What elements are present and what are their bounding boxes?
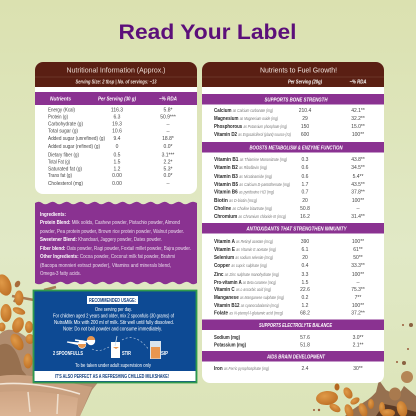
nutrition rows: --	[166, 181, 170, 187]
panel: ingredients: Other Ingredients: Cocoa powder, Coconut milk fat powder, Brahmi	[40, 254, 175, 260]
section: metabolism: BOOSTS METABOLISM & ENZYME FUNCTION	[250, 146, 343, 152]
column headings	[35, 92, 197, 105]
nutrition rows: Added sugar (unrefined) (g)	[48, 136, 105, 142]
table header: Nutritional Information (Approx.)	[66, 66, 166, 74]
section: immunity: 390	[301, 239, 309, 245]
section: immunity: 37.2**	[351, 310, 365, 316]
nutrition rows: 0.0*	[164, 173, 172, 179]
illustration: milkshake glass with almonds	[0, 272, 100, 416]
nutrition rows: Total Fat (g)	[48, 160, 70, 166]
illustration: almonds and walnuts bottom right	[313, 323, 416, 416]
section: brain development: 30**	[353, 366, 363, 372]
section: metabolism: 43.5**	[351, 182, 365, 188]
section: bone strength: Magnesium as Magnesium oxide (mg)	[214, 116, 278, 122]
section: bone strength: 15.0**	[351, 124, 365, 130]
icon: stir glass: STIR	[122, 351, 131, 357]
icon: sip glass: SIP	[161, 351, 168, 357]
nutrition rows: Protein (g)	[48, 114, 68, 120]
milkshake strip	[34, 371, 196, 381]
section: electrolyte balance: SUPPORTS ELECTROLYTE BALANCE	[259, 323, 332, 329]
section: brain development: 2.4	[302, 366, 309, 372]
section: immunity: 22.6	[300, 287, 310, 293]
section: brain development: Iron as Ferric pyrophosphate (mg)	[214, 366, 269, 372]
section: metabolism: Vitamin B5 as Calcium D-pantothenate (mg)	[214, 182, 291, 188]
panel: ingredients: Omega-3 fatty acids.	[40, 271, 81, 277]
section: metabolism: 16.2	[300, 214, 310, 220]
section: metabolism: 31.4**	[351, 214, 365, 220]
section: electrolyte balance: Sodium (mg)	[214, 335, 240, 341]
panel: nutritional information	[35, 62, 197, 194]
nutrition rows: 0.00	[112, 173, 122, 179]
panel: ingredients: Protein Blend: Milk solids, Cashew powder, Pistachio powder, Almond	[40, 220, 180, 226]
nutrition rows: Added sugar (refined) (g)	[48, 144, 100, 150]
nutrition rows: 0	[116, 144, 119, 150]
panel: nutrients to fuel growth	[202, 62, 384, 383]
nutrition rows: 0.0*	[164, 144, 172, 150]
nutrition rows: Saturated fat (g)	[48, 166, 82, 172]
section: immunity: 7**	[355, 295, 361, 301]
section: immunity: 50**	[353, 255, 363, 261]
section: metabolism: Choline as Choline bitartrate (mg)	[214, 206, 273, 212]
icon: two spoonfuls	[53, 336, 95, 357]
section: bone strength: 150	[301, 124, 309, 130]
nutrition rows: 10.6	[112, 128, 122, 134]
section: immunity: ANTIOXIDANTS THAT STRENGTHEN IMMUNITY	[246, 226, 347, 232]
section: immunity: 33.3**	[351, 263, 365, 269]
section: metabolism: Vitamin B6 as pyridoxine HCl (mg)	[214, 190, 274, 196]
arrows between steps	[92, 338, 149, 350]
nutrition rows: --	[166, 128, 170, 134]
section: bone strength: SUPPORTS BONE STRENGTH	[264, 98, 328, 104]
section: bone strength: 210.4	[299, 108, 311, 114]
icon: two spoonfuls: 2 SPOONFULLS	[53, 351, 83, 357]
usage instructions: Note: Do not boil powder and consume immediately.	[63, 326, 162, 332]
column headings: ~% RDA	[159, 96, 177, 102]
section: immunity: Vitamin B12 as cyanocobalamin (mcg)	[214, 303, 279, 309]
section: bone strength: Calcium as Calcium carbonate (mg)	[214, 108, 273, 114]
nutrition rows: 0.00	[112, 181, 122, 187]
section: electrolyte balance: 3.0**	[353, 335, 363, 341]
section: metabolism: Vitamin B1 as Thiamine Mononitrate (mg)	[214, 157, 288, 163]
column headings: Nutrients	[50, 96, 71, 102]
section: metabolism: 100**	[352, 198, 364, 204]
usage instructions	[53, 307, 174, 332]
section: electrolyte balance: Potassium (mg)	[214, 342, 246, 348]
section: immunity: Vitamin E as Vitamin E acetate (mg)	[214, 247, 276, 253]
nutrition rows: Trans fat (g)	[48, 173, 72, 179]
panel: ingredients: Fiber blend: Oats powder, Ragi powder, Foxtail millet powder, Bajra powder.	[40, 246, 191, 252]
section: metabolism: 5.4**	[353, 174, 363, 180]
section: immunity: 100**	[352, 303, 364, 309]
icon: sip glass	[150, 341, 168, 359]
section: metabolism: --	[356, 206, 360, 212]
section: immunity: Zinc as Zinc sulphate monohydrate (mg)	[214, 272, 279, 278]
section: electrolyte balance	[202, 320, 384, 348]
nutrition rows: 3.1***	[162, 152, 174, 158]
section: bone strength: Phosphorous as Potassium phosphate (mg)	[214, 124, 287, 130]
section: immunity: 68.2	[300, 310, 310, 316]
panel: ingredients: (Bacopa monnieri extract powder), Vitamins and minerals blend,	[40, 263, 171, 269]
panel: ingredients: Sweetener Blend: Khandsari, Jaggery powder, Dates powder.	[40, 237, 162, 243]
section: immunity: 1.5	[302, 280, 309, 286]
section: immunity: Folate as N-pteroyl-l-glutamic acid (mcg)	[214, 310, 284, 316]
section: bone strength: 42.1**	[351, 108, 365, 114]
section: metabolism: 37.8**	[351, 190, 365, 196]
section: immunity: 61**	[353, 247, 363, 253]
milkshake strip: IT'S ALSO PERFECT AS A REFRESHING CHILLED MILKSHAKE!	[55, 374, 169, 380]
icon: stir glass	[111, 336, 131, 358]
section: immunity: --	[356, 280, 360, 286]
section: immunity: 0.2	[302, 295, 309, 301]
section: metabolism: 20	[302, 198, 308, 204]
table header	[202, 62, 384, 87]
usage instructions: NutraMilk Mix with 200 ml of milk. Stir well until fully dissolved.	[54, 320, 174, 326]
nutrition rows: Carbohydrate (g)	[48, 122, 83, 128]
table header: ~% RDA	[350, 80, 367, 86]
section: immunity: 75.3**	[351, 287, 365, 293]
usage badge	[87, 296, 138, 304]
section: metabolism: 0.3	[302, 157, 309, 163]
section: immunity: Manganese as Manganese sulphate (mg)	[214, 295, 284, 301]
nutrition rows: 19.3	[112, 122, 122, 128]
panel: recommended usage	[34, 290, 196, 382]
panel: ingredients: powder, Pea protein powder, Brown rice protein powder, Walnut powder.	[40, 229, 184, 235]
usage badge: RECOMMENDED USAGE:	[89, 298, 136, 304]
section: bone strength: 600	[301, 132, 309, 138]
section: metabolism: 50.8	[300, 206, 310, 212]
nutrition rows: 2.2*	[164, 160, 172, 166]
table header	[35, 62, 197, 87]
section: immunity: Selenium as sodium selenite (mcg)	[214, 255, 273, 261]
section: metabolism	[202, 142, 384, 220]
nutrition rows: 9.4	[114, 136, 121, 142]
panel: ingredients	[35, 202, 197, 284]
section: electrolyte balance: 2.1**	[353, 342, 363, 348]
section: immunity: Vitamin C as L-ascorbic acid (mg)	[214, 287, 271, 293]
nutrition rows: 50.9***	[160, 114, 176, 120]
usage instructions: One serving per day.	[95, 307, 132, 313]
section: bone strength: 29	[302, 116, 308, 122]
supervision note: To be taken under adult supervision only	[75, 363, 151, 369]
section: metabolism: 34.5**	[351, 165, 365, 171]
nutrition rows: Total sugar (g)	[48, 128, 78, 134]
section: metabolism: 43.8**	[351, 157, 365, 163]
section: immunity: Pro-vitamin A as Beta carotene (mcg)	[214, 280, 276, 286]
section: brain development	[202, 351, 384, 372]
section: immunity: Copper as cupric sulphate (mg)	[214, 263, 267, 269]
section: metabolism: 0.6	[302, 165, 309, 171]
nutrition rows	[48, 108, 176, 187]
section: immunity: 6.1	[302, 247, 309, 253]
nutrition rows: --	[166, 122, 170, 128]
section: metabolism: Biotin as D-biotin (mcg)	[214, 198, 258, 204]
section: metabolism: 0.7	[302, 190, 309, 196]
section: metabolism: Vitamin B3 as Nicotinamide (mg)	[214, 174, 273, 180]
table header: Serving Size: 2 tbsp | No. of servings: ~13	[76, 80, 157, 86]
section: immunity: 100**	[352, 272, 364, 278]
section: metabolism: Chromium as Chromium chloride III (mcg)	[214, 214, 286, 220]
panel: ingredients: Ingredients:	[40, 212, 66, 218]
title: Read Your Label	[118, 21, 296, 44]
section: metabolism: Vitamin B2 as Riboflavin (mg)	[214, 165, 267, 171]
section: immunity: Vitamin A as Retinyl acetate (mcg)	[214, 239, 273, 245]
section: metabolism: 1.7	[302, 182, 309, 188]
nutrition rows: Dietary fiber (g)	[48, 152, 79, 158]
section: immunity: 0.4	[302, 263, 309, 269]
column headings: Per Serving (30 g)	[98, 96, 136, 102]
nutrition rows: 1.2	[114, 166, 121, 172]
nutrition rows: 0.5	[114, 152, 121, 158]
section: immunity	[202, 223, 384, 316]
section: immunity: 3.3	[302, 272, 309, 278]
usage instructions: For children aged 2 years and older, mix 2 spoonfuls (30 grams) of	[53, 314, 174, 320]
section: electrolyte balance: 57.6	[300, 335, 310, 341]
nutrition rows: 18.8*	[162, 136, 174, 142]
nutrition rows: 5.3*	[164, 166, 172, 172]
table header: Per Serving (20g)	[288, 80, 322, 86]
nutrition rows: Cholesterol (mg)	[48, 181, 83, 187]
section: immunity: 100**	[352, 239, 364, 245]
nutrition rows: 116.3	[111, 108, 123, 114]
nutrition rows: 6.3	[114, 114, 121, 120]
section: immunity: 1.2	[302, 303, 309, 309]
section: bone strength: 32.2**	[351, 116, 365, 122]
section: immunity: 20	[302, 255, 308, 261]
section: bone strength: 100**	[352, 132, 364, 138]
table header: Nutrients to Fuel Growth!	[260, 66, 337, 74]
nutrition rows: 1.5	[114, 160, 121, 166]
section: metabolism: 0.6	[302, 174, 309, 180]
section: bone strength	[202, 94, 384, 138]
section: bone strength: Vitamin D2 as Ergocalciferol (plant) source (IU)	[214, 132, 291, 138]
nutrition rows: Energy (Kcal)	[48, 108, 75, 114]
nutrition rows: 5.8*	[164, 108, 172, 114]
section: brain development: AIDS BRAIN DEVELOPMENT	[266, 354, 325, 360]
section: electrolyte balance: 51.8	[300, 342, 310, 348]
